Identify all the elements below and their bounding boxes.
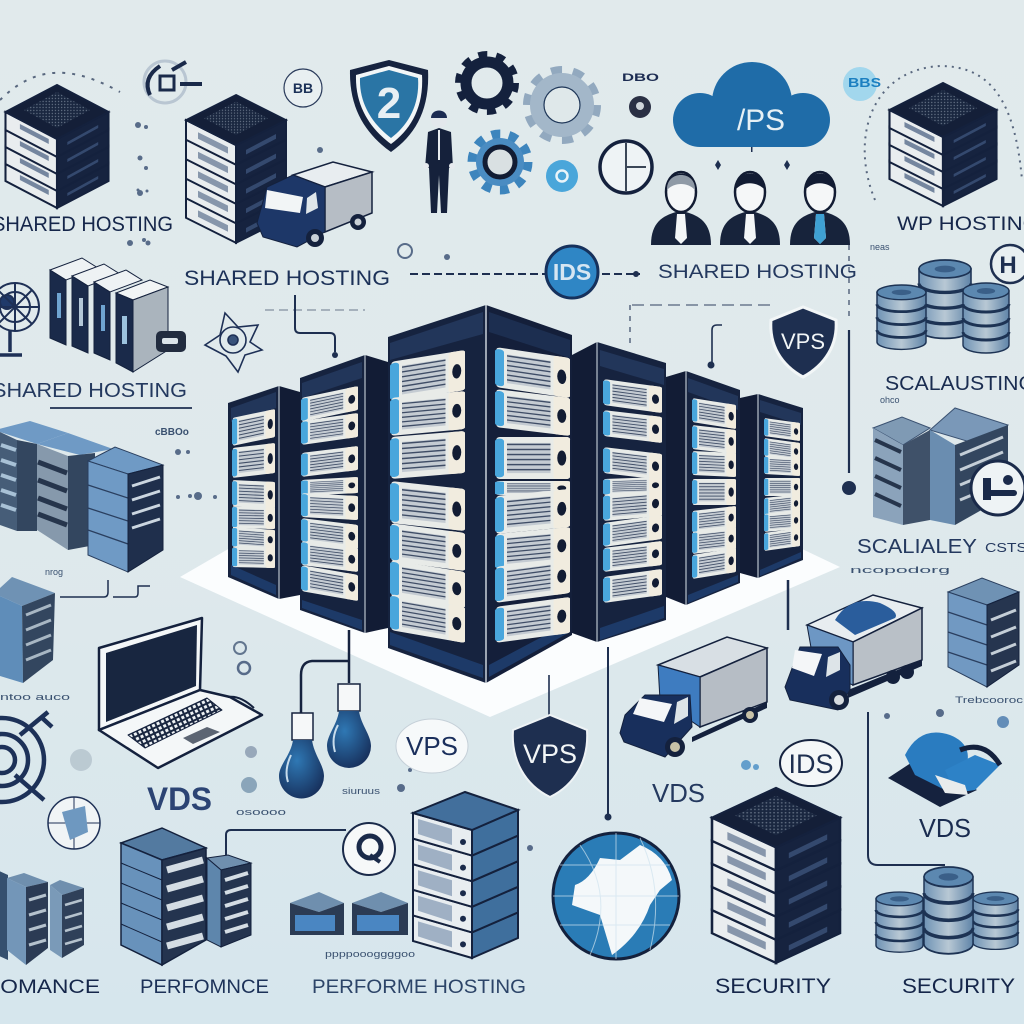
icon: person standing xyxy=(423,110,455,213)
icon: circle H xyxy=(991,245,1024,283)
small caption fragments: nrog xyxy=(45,567,63,577)
cloud VPS: /PS xyxy=(737,104,785,137)
cloud VPS xyxy=(673,62,830,147)
icon: target spiral xyxy=(0,712,52,802)
globe xyxy=(553,833,679,959)
badge: IDS oval xyxy=(780,740,842,786)
connector lines xyxy=(0,66,1022,865)
rack 2 xyxy=(300,355,388,633)
small caption fragments: cBBOo xyxy=(155,427,189,438)
rack 3 centre xyxy=(388,305,572,683)
truck right open xyxy=(785,595,922,710)
server stack: WP hosting xyxy=(890,83,996,206)
connector dots xyxy=(715,147,790,170)
rack 4 xyxy=(572,342,666,642)
icon: delivery truck top xyxy=(257,162,372,247)
servers mid left xyxy=(0,421,163,572)
rack 6 xyxy=(740,394,803,578)
small caption fragments: ntoo auco xyxy=(0,692,70,702)
icon: clock xyxy=(600,141,652,193)
badge: BBS xyxy=(843,67,881,101)
rack 5 xyxy=(666,371,740,605)
truck middle xyxy=(620,637,767,757)
hanging bulbs xyxy=(279,630,371,799)
label: VDS right: VDS xyxy=(919,813,971,843)
icon: globe circle small xyxy=(48,797,100,849)
label: performance hosting: PERFORME HOSTING xyxy=(312,977,526,998)
label: security 1: SECURITY xyxy=(715,975,831,998)
small caption fragments xyxy=(0,242,1024,959)
small caption fragments: ncopodorg xyxy=(850,565,950,575)
small tag: DBO xyxy=(622,72,660,84)
icon: badge circle xyxy=(284,69,322,107)
small decorative specks xyxy=(70,122,1009,851)
oval VPS: VPS xyxy=(406,731,458,761)
small caption fragments: ohco xyxy=(880,395,900,405)
label: scalability hosting: SCALAUSTING xyxy=(885,373,1024,395)
icon: hexagon seal xyxy=(205,313,262,372)
badge: IDS: IDS xyxy=(553,259,591,285)
server stack: performance blue xyxy=(413,792,518,958)
label: performance 2: PERFOMNCE xyxy=(140,977,269,998)
laptop xyxy=(99,618,262,768)
database cans bottom right xyxy=(876,867,1018,954)
small server boxes xyxy=(290,892,408,935)
small caption fragments: siuruus xyxy=(342,786,381,796)
people group xyxy=(651,172,850,245)
database cans right xyxy=(877,260,1009,353)
servers bottom left xyxy=(0,870,84,965)
icon: badge circle: BB xyxy=(293,80,313,96)
label: costs small: CSTS xyxy=(985,540,1024,555)
tower servers row xyxy=(50,258,168,372)
label: VDS middle: VDS xyxy=(652,778,705,808)
white platform floor xyxy=(180,548,840,717)
label: shared hosting right: SHARED HOSTING xyxy=(658,262,857,283)
icon: blue gear xyxy=(472,134,528,190)
badge: IDS xyxy=(546,246,598,298)
oval VPS xyxy=(396,719,468,773)
label: WP hosting: WP HOSTING xyxy=(897,214,1024,235)
server stack: top left xyxy=(6,85,109,208)
small caption fragments: Trebcooroc xyxy=(955,695,1024,705)
small caption fragments: neas xyxy=(870,242,890,252)
servers right xyxy=(873,408,1008,525)
icon: circle badge right xyxy=(971,461,1024,515)
label: VDS bold: VDS xyxy=(147,781,212,817)
icon: web fan xyxy=(0,283,39,355)
server bottom right xyxy=(948,578,1019,687)
shield VPS right xyxy=(771,307,836,377)
label: scalability costs: SCALIALEY xyxy=(857,536,977,558)
icon: small plug tag xyxy=(156,331,186,352)
label: security 2: SECURITY xyxy=(902,975,1015,998)
icon: blue cloth pile xyxy=(888,732,1000,807)
icon: security shield: 2 xyxy=(377,79,401,128)
server far left xyxy=(0,577,55,683)
server stack: security xyxy=(712,788,840,963)
badge: IDS oval: IDS xyxy=(788,749,834,779)
icon: circle badge centre xyxy=(343,823,395,875)
server stack: second xyxy=(186,95,286,243)
label: shared hosting centre: SHARED HOSTING xyxy=(184,267,390,290)
icon: security shield xyxy=(350,60,428,152)
small caption fragments: osoooo xyxy=(236,807,286,817)
shield VPS: VPS xyxy=(523,739,577,769)
server performance left xyxy=(121,828,251,965)
rack 1 xyxy=(228,386,300,599)
shield VPS right: VPS xyxy=(781,329,825,354)
small caption fragments: ppppoooggggoo xyxy=(325,949,415,959)
central server racks xyxy=(228,305,803,683)
badge: BBS: BBS xyxy=(848,75,881,90)
icon: circle H: H xyxy=(999,252,1017,279)
shield VPS xyxy=(513,715,587,797)
icon: dark gear xyxy=(459,55,515,111)
dot nodes xyxy=(332,271,856,820)
icon: small dark dot xyxy=(629,96,651,118)
icon: grey gear xyxy=(529,72,595,138)
icon: light blue circle xyxy=(546,160,578,192)
icon: key circle xyxy=(144,61,202,103)
